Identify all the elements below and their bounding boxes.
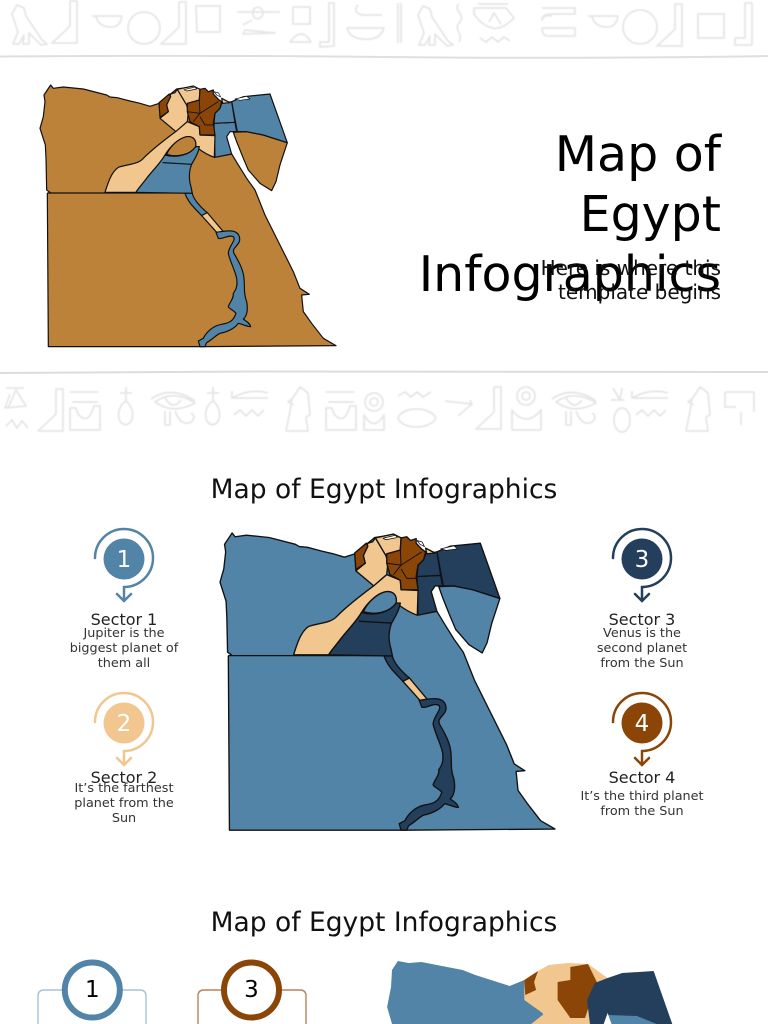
number 1: 1 — [117, 547, 131, 573]
text: sector 2: It’s the farthest — [75, 781, 173, 796]
card number 1: 1 — [85, 977, 100, 1003]
card number 3: 3 — [244, 977, 259, 1003]
title: Egypt — [580, 186, 721, 243]
icon: sector 4 marker — [613, 693, 671, 765]
text: sector 1: biggest planet of — [70, 641, 178, 656]
heading: cards section: Map of Egypt Infographics — [211, 907, 557, 938]
card: sector 3 outline — [198, 990, 306, 1024]
decorative divider: middle — [0, 371, 768, 373]
title — [419, 126, 722, 303]
text: sector 1 — [70, 626, 178, 671]
text: sector 3 — [597, 626, 687, 671]
number 4: 4 — [635, 711, 649, 737]
label: sector 3: Sector 3 — [609, 610, 675, 629]
text: sector 2 — [74, 781, 174, 826]
text: sector 4: It’s the third planet — [580, 789, 704, 804]
text: sector 1: them all — [98, 656, 150, 671]
number 2: 2 — [117, 711, 131, 737]
label: sector 2: Sector 2 — [91, 768, 157, 787]
text: sector 2: planet from the — [74, 796, 174, 811]
text: sector 3: Venus is the — [603, 626, 681, 641]
text: sector 3: second planet — [597, 641, 687, 656]
text: sector 2: Sun — [112, 811, 136, 826]
text: sector 1: Jupiter is the — [83, 626, 165, 641]
subtitle — [541, 256, 721, 304]
heading: sectors section: Map of Egypt Infographics — [211, 474, 557, 505]
label: sector 1: Sector 1 — [91, 610, 157, 629]
text: sector 3: from the Sun — [600, 656, 684, 671]
text: sector 4: from the Sun — [600, 804, 684, 819]
decorative hieroglyph band: top — [12, 1, 752, 47]
number 3: 3 — [635, 547, 649, 573]
badge: card 1 ring — [65, 962, 120, 1018]
subtitle: Here is where this — [541, 256, 721, 280]
map: Egypt hero, ochre — [40, 85, 336, 347]
title: Infographics — [419, 246, 721, 303]
card: sector 1 outline — [38, 990, 146, 1024]
icon: sector 2 marker — [95, 693, 153, 765]
text: sector 4 — [580, 789, 704, 819]
decorative divider: top — [0, 56, 768, 58]
map: Egypt sectors, blue — [220, 533, 555, 830]
decorative hieroglyph band: lower — [5, 387, 754, 432]
badge: card 3 ring — [224, 962, 279, 1018]
title: Map of — [555, 126, 721, 183]
icon: sector 3 marker — [613, 529, 671, 601]
label: sector 4: Sector 4 — [609, 768, 675, 787]
icon: sector 1 marker — [95, 529, 153, 601]
subtitle: template begins — [558, 280, 721, 304]
map: Egypt cropped at bottom — [387, 961, 672, 1024]
